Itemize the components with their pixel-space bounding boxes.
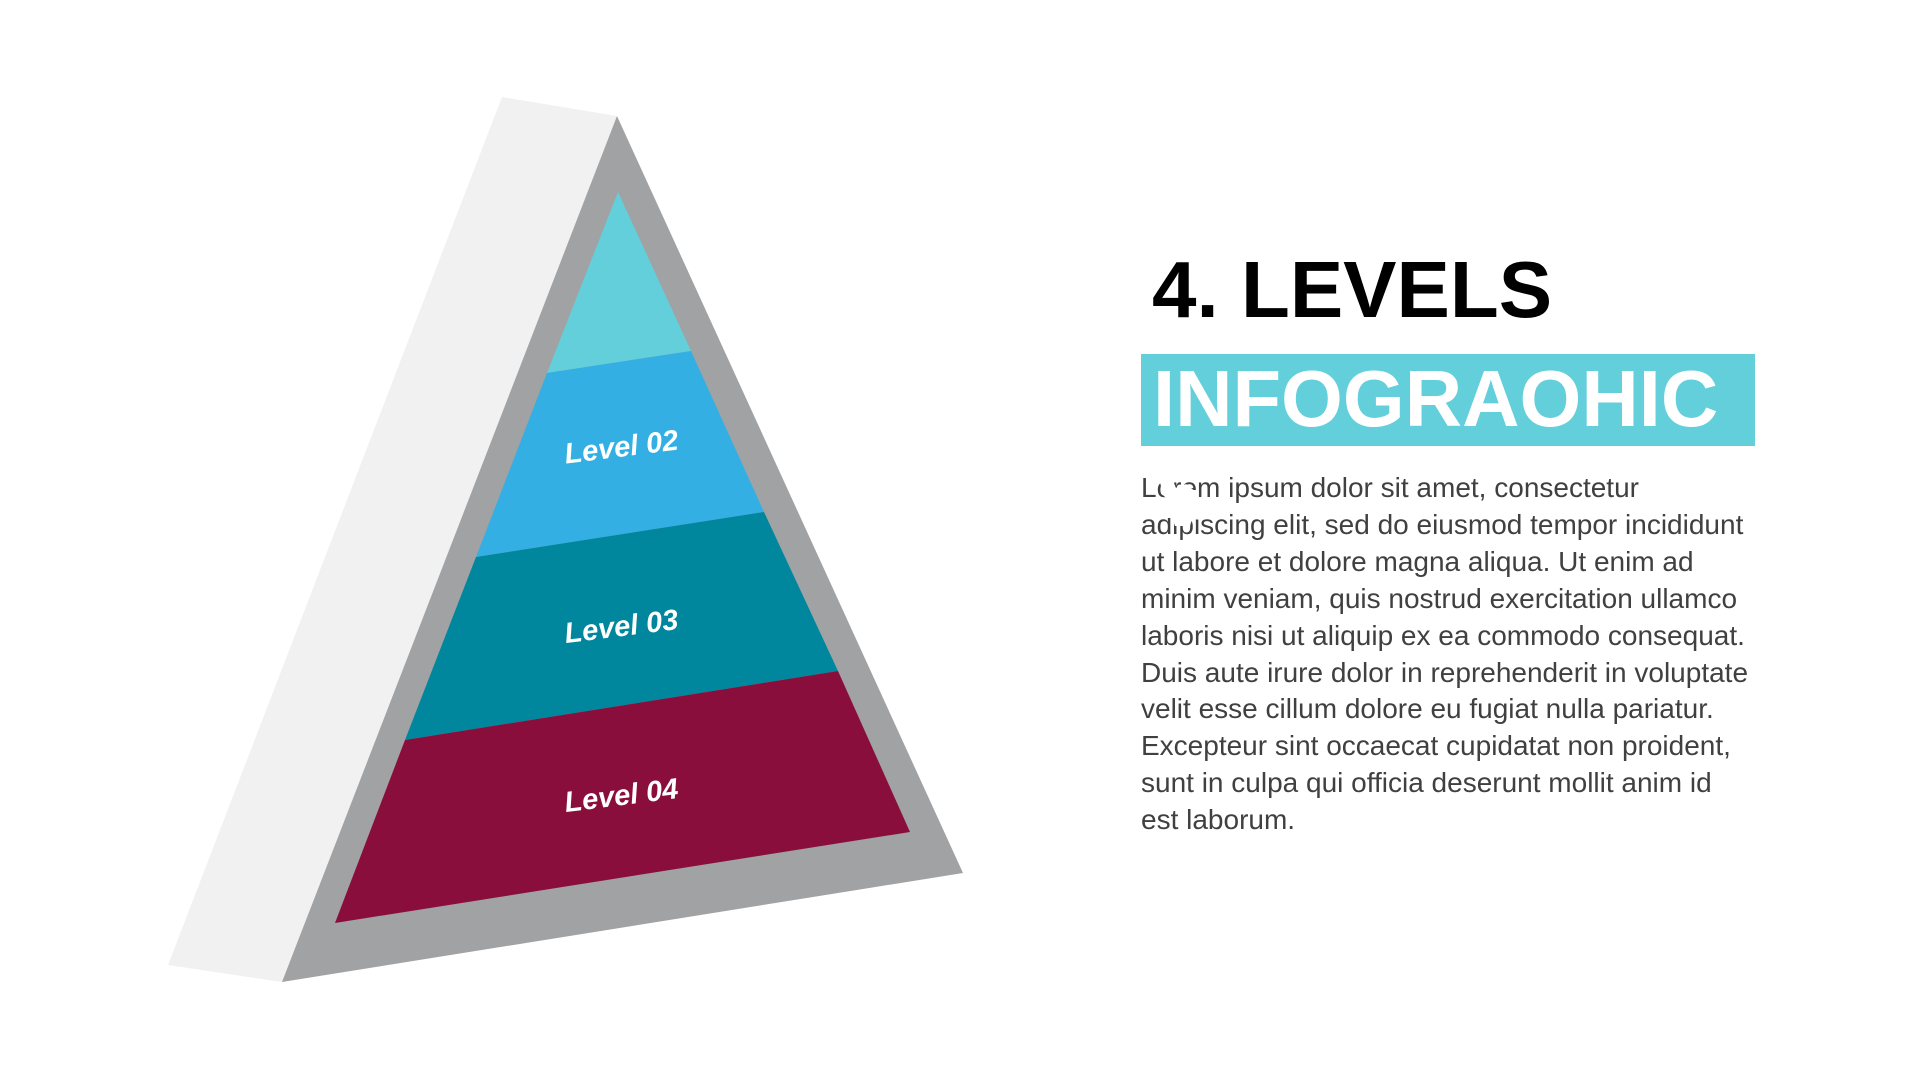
body paragraph bbox=[1141, 472, 1748, 835]
white video artefact over text bbox=[1160, 482, 1198, 526]
body paragraph: ut labore et dolore magna aliqua. Ut enim ad bbox=[1141, 546, 1694, 577]
body paragraph: velit esse cillum dolore eu fugiat nulla pariatur. bbox=[1141, 693, 1714, 724]
level 03 band bbox=[405, 512, 838, 740]
body paragraph: Excepteur sint occaecat cupidatat non proident, bbox=[1141, 730, 1731, 761]
label: level 02: Level 02 bbox=[563, 425, 680, 471]
body paragraph: est laborum. bbox=[1141, 804, 1295, 835]
body paragraph: adipiscing elit, sed do eiusmod tempor incididunt bbox=[1141, 509, 1743, 540]
body paragraph: Lorem ipsum dolor sit amet, consectetur bbox=[1141, 472, 1639, 503]
level 04 band bbox=[335, 671, 910, 923]
body paragraph: laboris nisi ut aliquip ex ea commodo consequat. bbox=[1141, 620, 1745, 651]
title: 4. LEVELS bbox=[1152, 245, 1552, 334]
level 02 band bbox=[476, 351, 764, 557]
body paragraph: Duis aute irure dolor in reprehenderit in voluptate bbox=[1141, 657, 1748, 688]
level 01 band bbox=[547, 192, 691, 373]
pyramid front frame bbox=[282, 116, 963, 982]
body paragraph: sunt in culpa qui officia deserunt mollit anim id bbox=[1141, 767, 1712, 798]
pyramid side face bbox=[168, 97, 617, 982]
label: level 04: Level 04 bbox=[563, 773, 680, 819]
label: level 03: Level 03 bbox=[563, 604, 680, 650]
subtitle banner: INFOGRAOHIC bbox=[1153, 354, 1718, 443]
body paragraph: minim veniam, quis nostrud exercitation ullamco bbox=[1141, 583, 1737, 614]
